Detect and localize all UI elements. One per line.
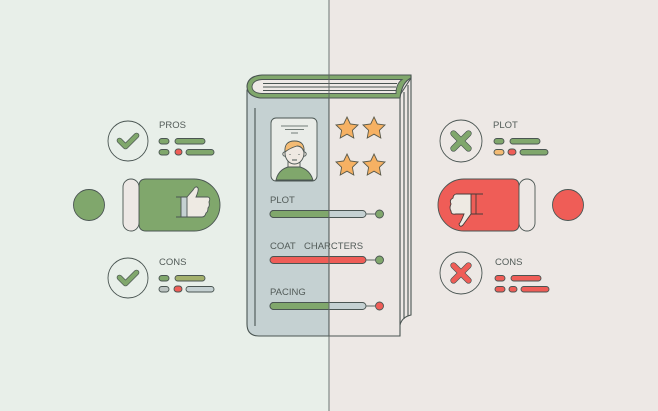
pills	[495, 276, 549, 292]
right cons block	[440, 252, 549, 294]
rating: characters	[270, 241, 384, 264]
book	[247, 75, 411, 336]
pill body	[438, 179, 519, 231]
icon: thumbs down	[450, 194, 483, 226]
pills	[494, 138, 548, 155]
pill body	[139, 179, 220, 231]
icon: x circle	[440, 120, 482, 162]
rating: characters: COAT	[270, 241, 296, 252]
pill cuff	[123, 179, 139, 231]
book cover left half	[247, 90, 329, 336]
left thumbs up control	[74, 179, 220, 231]
book cover right half	[329, 90, 400, 336]
left circle	[74, 190, 104, 220]
right pros block	[440, 120, 548, 162]
icon: check circle	[108, 258, 148, 298]
heading: plot: PLOT	[493, 120, 518, 131]
background: right panel	[329, 0, 658, 411]
center divider	[328, 0, 330, 411]
infographic content	[74, 0, 584, 411]
portrait header lines	[281, 126, 308, 133]
rating: plot: PLOT	[270, 195, 295, 206]
left cons block	[108, 257, 214, 298]
background: left panel	[0, 0, 329, 411]
star 4	[363, 154, 385, 175]
star 2	[363, 117, 385, 138]
pills	[159, 276, 214, 292]
pills	[159, 138, 214, 155]
rating: pacing	[270, 287, 384, 310]
heading: cons: CONS	[495, 257, 522, 268]
right thumbs down control	[438, 179, 584, 231]
star 1	[336, 117, 358, 138]
left pros block	[108, 120, 214, 161]
rating: pacing: PACING	[270, 287, 306, 298]
portrait shoulders	[276, 166, 313, 180]
star ratings	[336, 117, 385, 175]
rating: plot	[270, 195, 384, 218]
pill cuff	[519, 179, 535, 231]
icon: check circle	[108, 121, 148, 161]
star 3	[336, 154, 358, 175]
heading: cons: CONS	[159, 257, 186, 268]
heading: pros: PROS	[159, 120, 186, 131]
icon: thumbs up	[176, 187, 210, 217]
book page edges	[400, 78, 411, 325]
icon: x circle	[440, 252, 482, 294]
right circle	[552, 190, 584, 220]
portrait head	[283, 141, 306, 167]
book spine line	[254, 108, 256, 326]
portrait card	[271, 118, 317, 181]
rating: characters: CHARCTERS	[304, 241, 363, 252]
book top band	[247, 75, 411, 98]
